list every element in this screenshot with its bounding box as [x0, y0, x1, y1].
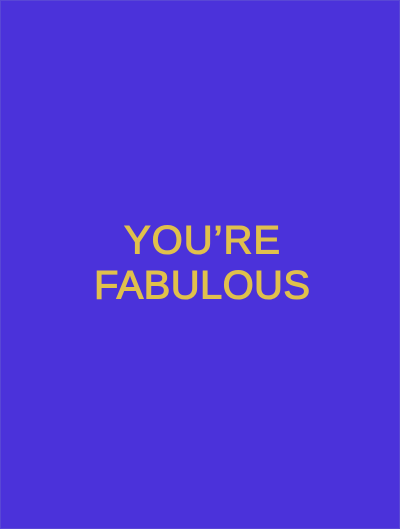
- line: FABULOUS: FABULOUS: [94, 264, 310, 308]
- title text: [94, 218, 310, 308]
- line: YOU'RE: YOU’RE: [124, 218, 280, 262]
